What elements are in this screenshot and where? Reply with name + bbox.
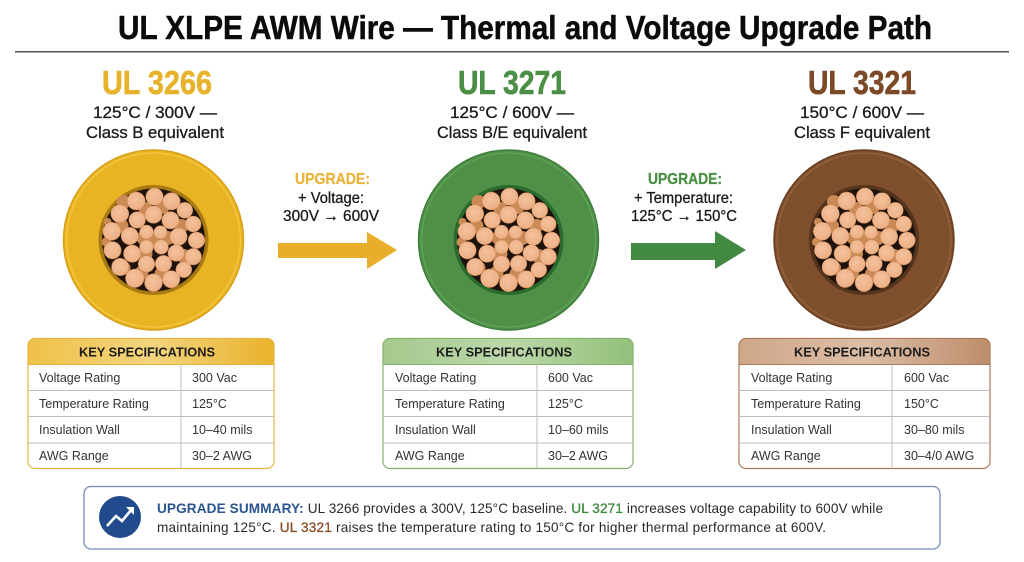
icon: brown wire cross-section xyxy=(774,150,954,330)
upgrade label: voltage: UPGRADE: xyxy=(295,171,370,188)
table: UL 3271 key specifications: Insulation Wall xyxy=(395,423,476,437)
upgrade label: voltage: + Voltage: xyxy=(298,190,364,207)
rating text: UL 3266: Class B equivalent xyxy=(86,124,224,142)
table: UL 3266 key specifications: 125°C xyxy=(192,397,227,411)
table: UL 3271 key specifications: AWG Range xyxy=(395,449,465,463)
rating text: UL 3321 xyxy=(794,104,930,142)
table: UL 3266 key specifications xyxy=(28,338,274,468)
table: UL 3266 key specifications: Voltage Rating xyxy=(39,371,120,385)
rating text: UL 3321: 150°C / 600V — xyxy=(800,104,925,122)
table: UL 3266 key specifications: KEY SPECIFICATIONS xyxy=(79,346,215,360)
table: UL 3266 key specifications: 10–40 mils xyxy=(192,423,252,437)
table: UL 3321 key specifications: 600 Vac xyxy=(904,371,949,385)
heading: UL 3271: UL 3271 xyxy=(458,64,566,101)
summary text: UPGRADE SUMMARY: UL 3266 provides a 300V, 125°C baseline. UL 3271 increases voltage capability to 600V while xyxy=(157,501,883,516)
rating text: UL 3271 xyxy=(437,104,587,142)
table: UL 3271 key specifications: Voltage Rating xyxy=(395,371,476,385)
table: UL 3271 key specifications: KEY SPECIFICATIONS xyxy=(436,346,572,360)
table: UL 3321 key specifications: 30–80 mils xyxy=(904,423,964,437)
table: UL 3266 key specifications: Temperature Rating xyxy=(39,397,149,411)
panel: UL 3271 xyxy=(383,64,633,468)
heading: UL 3321: UL 3321 xyxy=(808,64,916,101)
table: UL 3271 key specifications xyxy=(383,338,633,468)
table: UL 3321 key specifications xyxy=(739,338,990,468)
upgrade label: voltage: 300V → 600V xyxy=(283,208,379,225)
table: UL 3266 key specifications: Insulation Wall xyxy=(39,423,120,437)
table: UL 3321 key specifications: 30–4/0 AWG xyxy=(904,449,974,463)
rating text: UL 3266 xyxy=(86,104,224,142)
arrow: green xyxy=(631,231,746,269)
rating text: UL 3266: 125°C / 300V — xyxy=(93,104,218,122)
table: UL 3321 key specifications: 150°C xyxy=(904,397,939,411)
arrow group: upgrade to 600V xyxy=(278,171,397,269)
table: UL 3271 key specifications: 125°C xyxy=(548,397,583,411)
icon: yellow wire cross-section xyxy=(64,150,244,330)
panel: UL 3321 xyxy=(739,64,990,468)
upgrade label: temperature: + Temperature: xyxy=(634,190,733,207)
table: UL 3271 key specifications: 30–2 AWG xyxy=(548,449,608,463)
table: UL 3266 key specifications: 300 Vac xyxy=(192,371,237,385)
table: UL 3321 key specifications: Temperature Rating xyxy=(751,397,861,411)
table: UL 3271 key specifications: 10–60 mils xyxy=(548,423,608,437)
table: UL 3321 key specifications: Insulation Wall xyxy=(751,423,832,437)
icon: green wire cross-section xyxy=(418,150,598,330)
upgrade label: temperature xyxy=(631,171,737,225)
heading: UL 3266: UL 3266 xyxy=(102,64,212,101)
table: UL 3271 key specifications: Temperature Rating xyxy=(395,397,505,411)
arrow group: upgrade to 150C xyxy=(631,171,746,269)
title: UL XLPE AWM Wire — Thermal and Voltage Upgrade Path xyxy=(118,9,932,46)
arrow: yellow xyxy=(278,232,397,269)
rating text: UL 3271: Class B/E equivalent xyxy=(437,124,587,142)
table: UL 3266 key specifications: AWG Range xyxy=(39,449,109,463)
callout: upgrade summary xyxy=(84,486,940,549)
summary text xyxy=(157,501,883,535)
rating text: UL 3321: Class F equivalent xyxy=(794,124,930,142)
panel: UL 3266 xyxy=(28,64,274,468)
upgrade label: voltage xyxy=(283,171,379,225)
table: UL 3321 key specifications: KEY SPECIFICATIONS xyxy=(794,346,930,360)
upgrade label: temperature: 125°C → 150°C xyxy=(631,208,737,225)
table: UL 3271 key specifications: 600 Vac xyxy=(548,371,593,385)
rating text: UL 3271: 125°C / 600V — xyxy=(450,104,575,122)
table: UL 3266 key specifications: 30–2 AWG xyxy=(192,449,252,463)
table: UL 3321 key specifications: AWG Range xyxy=(751,449,821,463)
icon: trend arrow xyxy=(99,496,141,538)
summary text: maintaining 125°C. UL 3321 raises the temperature rating to 150°C for higher thermal performance at 600V. xyxy=(157,520,826,535)
table: UL 3321 key specifications: Voltage Rating xyxy=(751,371,832,385)
upgrade label: temperature: UPGRADE: xyxy=(648,171,722,188)
